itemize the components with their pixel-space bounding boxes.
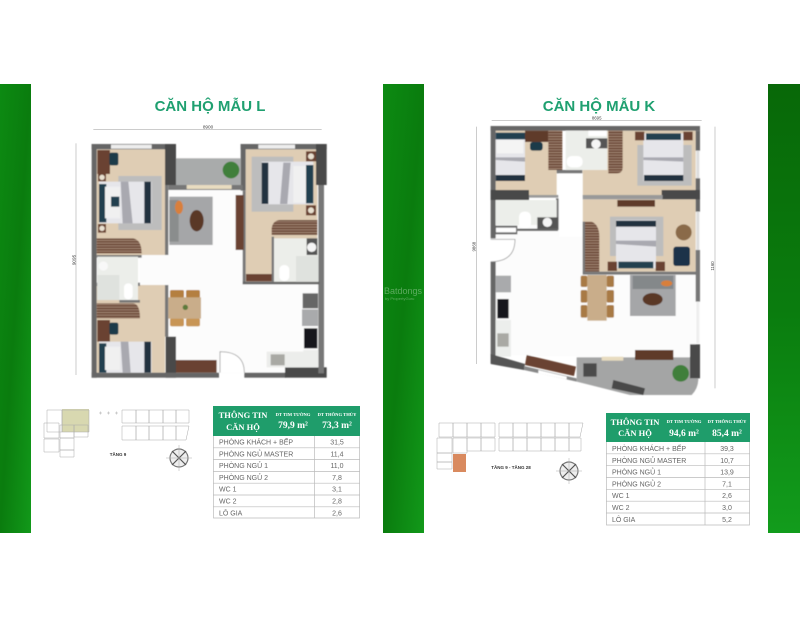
key plan K <box>437 423 583 472</box>
table K: 7,1 <box>722 482 732 488</box>
table K: WC 2 <box>612 505 630 512</box>
kitchen K <box>496 276 511 357</box>
table L: 3,1 <box>332 487 342 494</box>
title: căn hộ mẫu K: CĂN HỘ MẪU K <box>543 97 655 115</box>
centre green band <box>383 84 424 533</box>
table L: 2,8 <box>332 498 342 506</box>
key plan L: TẦNG 9 <box>110 451 127 457</box>
dimension labels K: 8695 <box>592 115 602 120</box>
table L: 2,6 <box>332 510 342 517</box>
dimension labels L: 8900 <box>203 125 214 130</box>
table K: 39,3 <box>720 446 734 453</box>
beds K <box>496 132 693 271</box>
door K <box>491 239 515 262</box>
table L: 31,5 <box>330 440 344 446</box>
lower façade K <box>491 354 577 382</box>
balcony L <box>168 158 243 190</box>
door L <box>220 352 244 373</box>
dimension labels L: 9095 <box>71 254 76 265</box>
table K: 5,2 <box>722 517 732 524</box>
table L: 79,9 m² <box>278 421 308 431</box>
right green band <box>768 84 800 533</box>
table L: DT THÔNG THỦY <box>318 412 357 417</box>
table K: 94,6 m² <box>669 429 699 439</box>
key plan L <box>44 409 189 457</box>
table K: LÔ GIA <box>612 515 636 524</box>
balcony K <box>577 344 700 395</box>
table K: 3,0 <box>722 505 732 512</box>
table K: 85,4 m² <box>712 429 742 439</box>
table K: THÔNG TIN <box>611 417 660 427</box>
table L: PHÒNG NGỦ 2 <box>219 473 268 482</box>
table L: 73,3 m² <box>322 421 352 431</box>
title: căn hộ mẫu L: CĂN HỘ MẪU L <box>155 97 265 115</box>
wardrobes and desks L <box>97 150 317 373</box>
table L: PHÒNG NGỦ MASTER <box>219 449 293 458</box>
dimension labels L <box>71 125 322 375</box>
table L: LÔ GIA <box>219 508 243 517</box>
watermark: Batdongs <box>384 286 423 296</box>
watermark: by PropertyGuru <box>385 296 414 301</box>
table K: 10,7 <box>720 458 734 465</box>
table L: 11,4 <box>330 451 344 458</box>
dimension labels K: 1160 <box>710 261 715 271</box>
table L <box>213 406 360 518</box>
dining table L <box>168 290 201 326</box>
table K: 2,6 <box>722 493 732 500</box>
compass K <box>556 458 582 484</box>
table L: PHÒNG KHÁCH + BẾP <box>219 436 293 446</box>
table K: WC 1 <box>612 493 630 500</box>
table L: 7,8 <box>332 475 342 482</box>
living area L <box>169 197 213 245</box>
living area K <box>630 275 676 316</box>
table L: DT TIM TƯỜNG <box>276 412 311 417</box>
table K: DT TIM TƯỜNG <box>667 419 702 424</box>
table K: PHÒNG KHÁCH + BẾP <box>612 443 686 453</box>
floor plan L <box>71 125 327 378</box>
watermark <box>384 286 423 301</box>
dimension labels K <box>472 115 715 388</box>
kitchen L <box>267 293 318 367</box>
table L: THÔNG TIN <box>219 410 268 420</box>
dimension labels K: 9868 <box>472 241 477 251</box>
compass L <box>166 445 192 471</box>
bathrooms L <box>97 237 318 303</box>
floor plan K <box>472 115 715 395</box>
table K: PHÒNG NGỦ MASTER <box>612 456 686 465</box>
table K: CĂN HỘ <box>618 428 652 438</box>
table K: PHÒNG NGỦ 2 <box>612 480 661 488</box>
wardrobes K <box>525 131 655 272</box>
bathrooms K <box>493 131 607 234</box>
table L: PHÒNG NGỦ 1 <box>219 461 268 470</box>
dining table K <box>581 275 614 321</box>
table K <box>606 413 750 525</box>
beds L <box>98 151 316 373</box>
table K: PHÒNG NGỦ 1 <box>612 468 661 476</box>
table L: WC 1 <box>219 487 237 494</box>
table K: 13,9 <box>720 470 734 476</box>
left green band <box>0 84 31 533</box>
table K: DT THÔNG THỦY <box>708 419 747 424</box>
key plan K: TẦNG 9 - TẦNG 28 <box>491 464 531 470</box>
table L: 11,0 <box>330 463 344 470</box>
table L: CĂN HỘ <box>226 422 260 432</box>
table L: WC 2 <box>219 498 237 506</box>
